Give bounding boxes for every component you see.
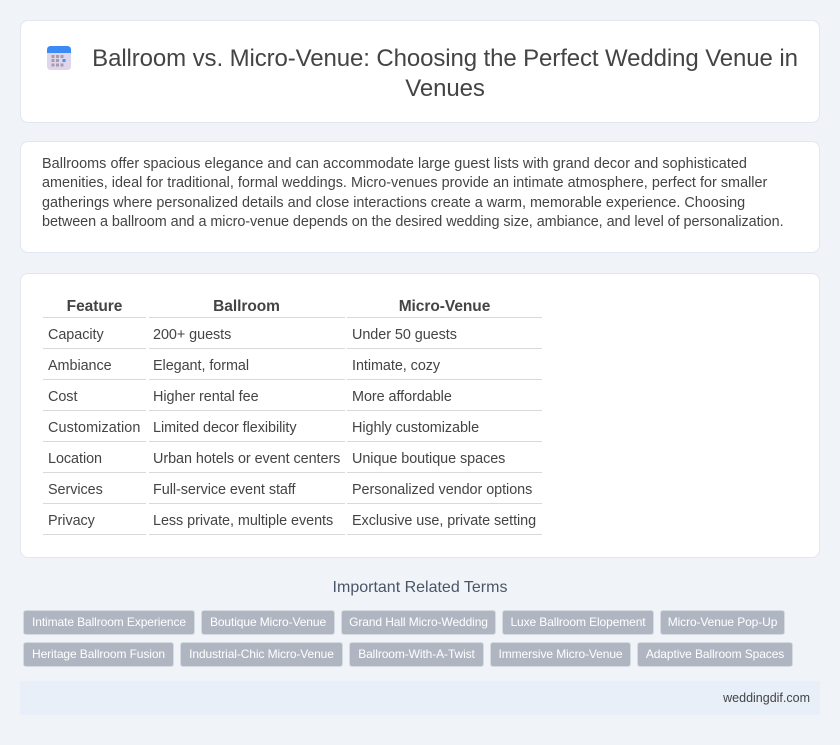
tag <box>502 610 654 635</box>
tag: Luxe Ballroom Elopement <box>510 615 646 629</box>
table header: Feature: Feature <box>67 298 122 315</box>
row: Services: Personalized vendor options <box>352 482 532 498</box>
description text: between a ballroom and a micro-venue depends on the desired wedding size, ambiance, and level of personalization. <box>42 214 784 230</box>
title: Venues <box>405 75 485 102</box>
table header: Micro-Venue: Micro-Venue <box>399 298 490 315</box>
row: Customization: Highly customizable <box>352 420 479 436</box>
row: Customization: Limited decor flexibility <box>153 420 297 436</box>
tag <box>180 642 343 667</box>
row: Capacity: 200+ guests <box>153 327 231 343</box>
row: Capacity: Capacity <box>48 327 104 343</box>
tag <box>201 610 335 635</box>
tag: Adaptive Ballroom Spaces <box>646 647 784 661</box>
tag: Industrial-Chic Micro-Venue <box>189 647 334 661</box>
tag <box>660 610 785 635</box>
row: Cost: Cost <box>48 389 77 405</box>
tag: Ballroom-With-A-Twist <box>358 647 475 661</box>
row: Cost: More affordable <box>352 389 452 405</box>
row: Ambiance: Intimate, cozy <box>352 358 440 374</box>
row: Capacity: Under 50 guests <box>352 327 457 343</box>
row: Customization <box>48 420 479 436</box>
row: Location: Location <box>48 451 102 467</box>
row: Services: Services <box>48 482 103 498</box>
row: Cost <box>48 389 452 405</box>
panel: description <box>20 141 820 253</box>
tag list: related terms <box>23 610 793 667</box>
row: Privacy: Privacy <box>48 513 95 529</box>
panel: comparison table <box>20 273 820 558</box>
row: Customization: Customization <box>48 420 140 436</box>
footer source text: weddingdif.com <box>723 691 810 705</box>
footer bar <box>20 681 820 715</box>
description text: gatherings where personalized details and close interactions create a warm, memorable experience. Choosing <box>42 195 745 211</box>
row: Cost: Higher rental fee <box>153 389 259 405</box>
tag: Immersive Micro-Venue <box>499 647 622 661</box>
tag <box>23 642 174 667</box>
row: Ambiance: Ambiance <box>48 358 112 374</box>
row: Location: Unique boutique spaces <box>352 451 505 467</box>
heading: related terms: Important Related Terms <box>333 579 507 596</box>
tag <box>23 610 195 635</box>
tag <box>349 642 484 667</box>
description text: amenities, ideal for traditional, formal weddings. Micro-venues provide an intimate atmosphere, perfect for smaller <box>42 175 767 191</box>
row: Privacy: Less private, multiple events <box>153 513 333 529</box>
row: Services <box>48 482 532 498</box>
title: Ballroom vs. Micro-Venue: Choosing the Perfect Wedding Venue in <box>92 45 798 72</box>
tag <box>341 610 496 635</box>
row: Ambiance: Elegant, formal <box>153 358 249 374</box>
icon: calendar <box>47 46 71 70</box>
tag: Heritage Ballroom Fusion <box>32 647 165 661</box>
row: Capacity <box>48 327 457 343</box>
description text <box>42 156 784 230</box>
row: Privacy: Exclusive use, private setting <box>352 513 536 529</box>
row: Ambiance <box>48 358 440 374</box>
row: Location <box>48 451 505 467</box>
description text: Ballrooms offer spacious elegance and can accommodate large guest lists with grand decor and sophisticated <box>42 156 747 172</box>
tag <box>490 642 631 667</box>
title <box>92 45 798 102</box>
row: Privacy <box>48 513 536 529</box>
table header: Ballroom: Ballroom <box>213 298 280 315</box>
tag: Boutique Micro-Venue <box>210 615 326 629</box>
tag <box>637 642 793 667</box>
tag: Micro-Venue Pop-Up <box>668 615 777 629</box>
row: Services: Full-service event staff <box>153 482 296 498</box>
row: Location: Urban hotels or event centers <box>153 451 340 467</box>
tag: Grand Hall Micro-Wedding <box>349 615 488 629</box>
panel: title card <box>20 20 820 123</box>
tag: Intimate Ballroom Experience <box>32 615 186 629</box>
